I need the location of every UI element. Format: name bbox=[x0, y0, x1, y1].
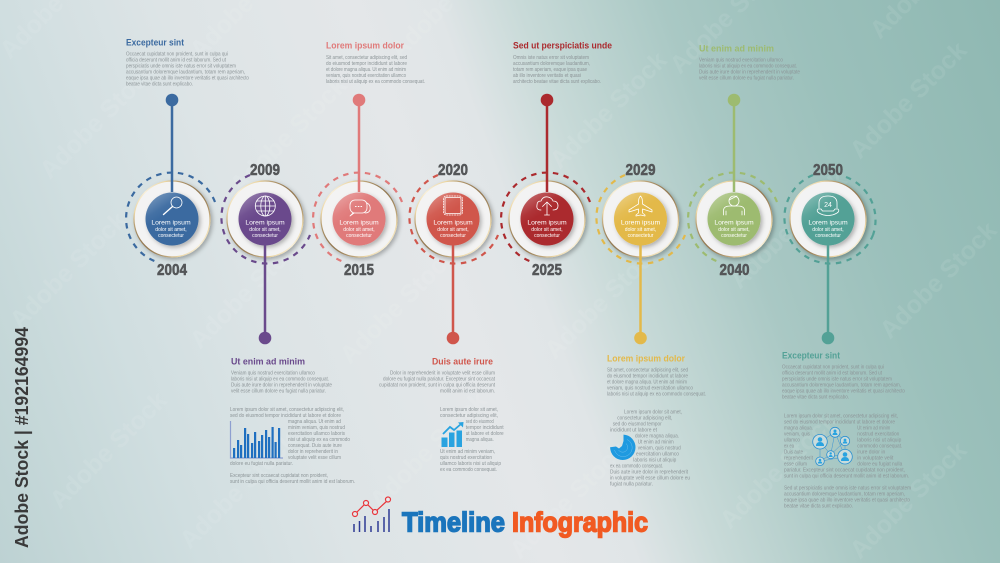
year 2050: 2050 bbox=[813, 162, 843, 179]
panel: step 8 text: esse cillum bbox=[784, 462, 807, 468]
panel: step 7 text bbox=[699, 44, 800, 82]
panel: step 6 text: Duis aute irure dolor in reprehenderit bbox=[610, 470, 689, 476]
text: Adobe Stock bbox=[334, 241, 462, 369]
panel: step 8 text: Occaecat cupidatat non proident, sunt in culpa qui bbox=[782, 364, 884, 370]
panel: step 7 text: Veniam quis nostrud exercitation ullamco bbox=[699, 58, 783, 64]
panel: step 8 text: in voluptate velit bbox=[857, 456, 894, 462]
text: Adobe Stock bbox=[364, 386, 492, 514]
panel: step 6 text: sed do eiusmod tempor bbox=[613, 422, 662, 428]
panel: step 5 text: ab illo inventore veritatis et quasi bbox=[513, 73, 581, 79]
text: Adobe Stock bbox=[224, 71, 352, 199]
step 1: 2004 milestone bbox=[126, 94, 215, 279]
panel: step 4 text: Ut enim ad minim veniam, bbox=[440, 449, 495, 455]
panel: step 4 text: dolore eu fugiat nulla pariatur. Excepteur sint occaecat bbox=[383, 377, 496, 383]
heading: step 5: Sed ut perspiciatis unde bbox=[513, 40, 612, 52]
text: Adobe Stock bbox=[504, 436, 632, 563]
pin: step 6 bbox=[634, 245, 647, 344]
pin: step 7 bbox=[728, 94, 740, 192]
text: Adobe Stock bbox=[174, 426, 302, 554]
icon: speech bubbles bbox=[350, 200, 370, 216]
step 8: 2050 milestone bbox=[784, 162, 876, 344]
panel: step 8 text: ex ea bbox=[784, 444, 794, 450]
panel: step 2 text: sunt in culpa qui officia deserunt mollit anim id est laborum. bbox=[230, 479, 355, 485]
panel: step 5 text: architecto beatae vitae dicta sunt explicabo. bbox=[513, 79, 601, 85]
step 2: 2009 milestone: consectetur bbox=[252, 233, 278, 239]
panel: step 3 text: veniam, quis nostrud exercitation ullamco bbox=[326, 73, 406, 79]
panel: step 2 text bbox=[230, 356, 355, 485]
step 7: 2040 milestone bbox=[688, 94, 777, 279]
year 2015: 2015 bbox=[344, 262, 374, 279]
pin: step 2 bbox=[259, 245, 271, 344]
icon: growth chart bbox=[442, 422, 464, 447]
panel: step 6 text: Ut enim ad minim bbox=[638, 440, 674, 446]
step 5: 2025 milestone: consectetur bbox=[534, 233, 560, 239]
step 2: 2009 milestone: Lorem ipsum bbox=[245, 220, 285, 226]
panel: step 8 text: magna aliqua. bbox=[784, 426, 813, 432]
pin: step 1 bbox=[166, 94, 178, 192]
panel: step 3 text bbox=[326, 40, 425, 85]
panel: step 8 text: Sed ut perspiciatis unde omnis iste natus error sit voluptatem bbox=[784, 486, 911, 492]
icon: support agent bbox=[724, 196, 744, 215]
panel: step 6 text: et dolore magna aliqua. Ut enim ad minim bbox=[607, 379, 687, 385]
heading: Timeline: Timeline bbox=[402, 506, 505, 538]
bar chart bbox=[230, 421, 283, 458]
panel: step 6 text: Sit amet, consectetur adipiscing elit, sed bbox=[607, 367, 688, 373]
icon: microchip bbox=[444, 196, 462, 215]
panel: step 3 text: Sit amet, consectetur adipiscing elit, sed bbox=[326, 55, 407, 61]
panel: step 3 text: do eiusmod tempor incididunt ut labore bbox=[326, 61, 407, 67]
icon: radial pie chart bbox=[610, 435, 635, 460]
heading: Infographic: Infographic bbox=[512, 506, 648, 538]
step 4: 2020 milestone bbox=[409, 162, 498, 344]
panel: step 6 text: veniam, quis nostrud bbox=[638, 446, 681, 452]
icon: magnifier bbox=[164, 197, 182, 214]
panel: step 8 text: accusantium doloremque laudantium, totam rem aperiam, bbox=[782, 382, 901, 388]
step 1: 2004 milestone: dolor sit amet, bbox=[155, 227, 187, 233]
step 1: 2004 milestone: consectetur bbox=[158, 233, 184, 239]
panel: step 4 text bbox=[379, 356, 504, 473]
heading: step 6: Lorem ipsum dolor bbox=[607, 354, 685, 364]
panel: step 5 text: totam rem aperiam, eaque ipsa quae bbox=[513, 67, 587, 73]
panel: step 2 text: consequat. Duis aute irure bbox=[288, 443, 342, 449]
panel: step 1 text: Occaecat cupidatat non proident, sunt in culpa qui bbox=[126, 52, 228, 58]
text: Adobe Stock bbox=[539, 236, 667, 364]
step 7: 2040 milestone: consectetur bbox=[721, 233, 747, 239]
panel: step 4 text: Lorem ipsum dolor sit amet, bbox=[440, 407, 498, 413]
step 5: 2025 milestone: Lorem ipsum bbox=[527, 220, 567, 226]
panel: step 6 text: Lorem ipsum dolor sit amet, bbox=[624, 410, 682, 416]
panel: step 2 text: Lorem ipsum dolor sit amet, consectetur adipiscing elit, bbox=[230, 407, 344, 413]
panel: step 2 text: velit esse cillum dolore eu fugiat nulla pariatur. bbox=[231, 389, 326, 395]
panel: step 2 text: voluptate velit esse cillum bbox=[288, 455, 341, 461]
panel: step 8 text: commodo consequat. bbox=[857, 444, 902, 450]
panel: step 4 text: consectetur adipiscing elit, bbox=[440, 413, 498, 419]
step 4: 2020 milestone: dolor sit amet, bbox=[437, 227, 469, 233]
year 2040: 2040 bbox=[720, 262, 750, 279]
panel: step 8 text: beatae vitae dicta sunt explicabo. bbox=[784, 504, 853, 510]
panel: step 2 text: magna aliqua. Ut enim ad bbox=[288, 419, 341, 425]
pin: step 4 bbox=[447, 245, 459, 344]
panel: step 5 text bbox=[513, 40, 612, 85]
panel: step 8 text: ullamco bbox=[784, 438, 800, 444]
panel: step 8 text: irure dolor in bbox=[857, 450, 886, 456]
panel: step 8 text: dolore eu fugiat nulla bbox=[857, 462, 902, 468]
panel: step 2 text: laboris nisi ut aliquip ex ea commodo consequat. bbox=[231, 377, 329, 383]
panel: step 8 text: accusantium doloremque laudantium, totam rem aperiam, bbox=[784, 492, 905, 498]
step 1: 2004 milestone: Lorem ipsum bbox=[151, 220, 191, 226]
icon: line and bar chart bbox=[352, 497, 390, 532]
panel: step 2 text: Veniam quis nostrud exercitation ullamco bbox=[231, 371, 315, 377]
panel: step 7 text: velit esse cillum dolore eu fugiat nulla pariatur. bbox=[699, 76, 794, 82]
panel: step 2 text: Excepteur sint occaecat cupidatat non proident, bbox=[230, 473, 328, 479]
step 3: 2015 milestone: consectetur bbox=[346, 233, 372, 239]
heading: step 1: Excepteur sint bbox=[126, 38, 185, 48]
step 4: 2020 milestone: consectetur bbox=[440, 233, 466, 239]
panel: step 1 text: beatae vitae dicta sunt explicabo. bbox=[126, 82, 193, 88]
panel: step 8 text: Duis aute bbox=[784, 450, 803, 456]
panel: step 6 text: incididunt ut labore et bbox=[610, 428, 658, 434]
panel: step 4 text: magna aliqua. bbox=[466, 437, 494, 443]
panel: step 6 text: fugiat nulla pariatur. bbox=[610, 482, 653, 488]
text: Adobe Stock bbox=[44, 386, 172, 514]
panel: step 7 text: laboris nisi ut aliquip ex ea commodo consequat. bbox=[699, 64, 797, 70]
panel: step 8 text: Ut enim ad minim bbox=[857, 426, 890, 432]
step 4: 2020 milestone: Lorem ipsum bbox=[433, 220, 473, 226]
panel: step 4 text: ex ea commodo consequat. bbox=[440, 467, 497, 473]
panel: step 8 text: eaque ipsa quae ab illo inventore veritatis et quasi architecto bbox=[784, 498, 910, 504]
panel: step 4 text: tempor incididunt bbox=[466, 425, 504, 431]
panel: step 4 text: quis nostrud exercitation bbox=[440, 455, 492, 461]
step 3: 2015 milestone: Lorem ipsum bbox=[339, 220, 379, 226]
panel: step 8 text: perspiciatis unde omnis iste natus error sit voluptatem bbox=[782, 376, 892, 382]
panel: step 3 text: et dolore magna aliqua. Ut enim ad minim bbox=[326, 67, 406, 73]
step 5: 2025 milestone bbox=[501, 94, 590, 279]
heading: step 4: Duis aute irure bbox=[432, 356, 493, 368]
step 8: 2050 milestone: 24 bbox=[824, 202, 832, 209]
panel: step 6 text: veniam, quis nostrud exercitation ullamco bbox=[607, 385, 693, 391]
year 2025: 2025 bbox=[532, 262, 562, 279]
panel: step 2 text: Duis aute irure dolor in reprehenderit in voluptate bbox=[231, 383, 332, 389]
text: Adobe Stock bbox=[34, 56, 162, 184]
panel: step 8 text: Lorem ipsum dolor sit amet, consectetur adipiscing elit, bbox=[784, 414, 898, 420]
step 8: 2050 milestone: Lorem ipsum bbox=[808, 220, 848, 226]
text: Adobe Stock bbox=[4, 206, 132, 334]
pin: step 8 bbox=[822, 245, 834, 344]
year 2009: 2009 bbox=[250, 162, 280, 179]
text: Adobe Stock bbox=[844, 436, 972, 563]
pin: step 3 bbox=[353, 94, 365, 192]
panel: step 5 text: Omnis iste natus error sit voluptatem bbox=[513, 55, 589, 61]
panel: step 6 text: exercitation ullamco bbox=[636, 452, 679, 458]
step 8: 2050 milestone: consectetur bbox=[815, 233, 841, 239]
panel: step 4 text: ut labore et dolore bbox=[466, 431, 504, 437]
year 2029: 2029 bbox=[626, 162, 656, 179]
text: Adobe Stock bbox=[724, 166, 852, 294]
step 6: 2029 milestone: consectetur bbox=[628, 233, 654, 239]
step 8: 2050 milestone: dolor sit amet, bbox=[812, 227, 844, 233]
step 6: 2029 milestone: Lorem ipsum bbox=[621, 220, 660, 226]
text: Adobe Stock bbox=[544, 46, 672, 174]
panel: step 8 text: nostrud exercitation bbox=[857, 432, 900, 438]
panel: step 4 text: ullamco laboris nisi ut aliquip bbox=[440, 461, 501, 467]
heading: step 2: Ut enim ad minim bbox=[231, 356, 305, 368]
panel: step 1 text bbox=[126, 38, 249, 88]
panel: step 8 text: veniam, quis bbox=[784, 432, 810, 438]
step 6: 2029 milestone: dolor sit amet, bbox=[625, 227, 656, 233]
panel: step 2 text: dolor in reprehenderit in bbox=[288, 449, 338, 455]
panel: step 6 text: dolore magna aliqua. bbox=[635, 434, 679, 440]
step 3: 2015 milestone bbox=[313, 94, 402, 279]
text: Adobe Stock bbox=[714, 406, 842, 534]
panel: step 6 text: laboris nisi ut aliquip ex ea commodo consequat. bbox=[607, 391, 706, 397]
panel: step 6 text: laboris nisi ut aliquip bbox=[633, 458, 677, 464]
step 7: 2040 milestone: Lorem ipsum bbox=[714, 220, 754, 226]
icon: 24h phone bbox=[817, 196, 839, 216]
panel: step 4 text: Dolor in reprehenderit in voluptate velit esse cillum bbox=[390, 371, 495, 377]
step 5: 2025 milestone: dolor sit amet, bbox=[531, 227, 563, 233]
panel: step 1 text: accusantium doloremque laudantium, totam rem aperiam, bbox=[126, 70, 245, 76]
panel: step 6 text: ex ea commodo consequat. bbox=[610, 464, 663, 470]
title block bbox=[352, 497, 648, 538]
step 6: 2029 milestone bbox=[596, 162, 685, 344]
step 7: 2040 milestone: dolor sit amet, bbox=[718, 227, 750, 233]
panel: step 1 text: eaque ipsa quae ab illo inventore veritatis et quasi architecto bbox=[126, 76, 249, 82]
heading: step 8: Excepteur sint bbox=[782, 350, 841, 362]
panel: step 1 text: perspiciatis unde omnis iste natus error sit voluptatem bbox=[126, 64, 236, 70]
text: Adobe Stock bbox=[184, 226, 312, 354]
year 2020: 2020 bbox=[438, 162, 468, 179]
year 2004: 2004 bbox=[157, 262, 187, 279]
panel: step 8 text: reprehenderit bbox=[784, 456, 814, 462]
panel: step 7 text: Duis aute irure dolor in reprehenderit in voluptate bbox=[699, 70, 800, 76]
icon: airplane bbox=[629, 196, 652, 216]
panel: step 2 text: sed do eiusmod tempor incididunt ut labore et dolore bbox=[230, 413, 341, 419]
text: Adobe Stock bbox=[874, 216, 1000, 344]
text: Adobe Stock bbox=[844, 36, 972, 164]
panel: step 5 text: accusantium doloremque laudantium, bbox=[513, 61, 590, 67]
stock id side label: Adobe Stock | #192164994 bbox=[12, 327, 32, 548]
panel: step 3 text: laboris nisi ut aliquip ex ea commodo consequat. bbox=[326, 79, 425, 85]
icon: globe bbox=[255, 196, 275, 216]
panel: step 1 text: officia deserunt mollit anim id est laborum. Sed ut bbox=[126, 58, 227, 64]
panel: step 4 text: sed do eiusmod bbox=[466, 419, 494, 425]
panel: step 8 text: sed do eiusmod tempor incididunt ut labore et dolore bbox=[784, 420, 895, 426]
panel: step 8 text: officia deserunt mollit anim id est laborum. Sed ut bbox=[782, 370, 883, 376]
icon: cloud upload bbox=[537, 197, 558, 215]
panel: step 8 text: beatae vitae dicta sunt explicabo. bbox=[782, 394, 849, 400]
panel: step 2 text: nisi ut aliquip ex ea commodo bbox=[288, 437, 350, 443]
panel: step 8 text bbox=[782, 350, 911, 510]
step 2: 2009 milestone bbox=[221, 162, 310, 344]
panel: step 6 text: in voluptate velit esse cillum dolore eu bbox=[610, 476, 690, 482]
heading: step 7: Ut enim ad minim bbox=[699, 44, 774, 54]
panel: step 4 text: cupidatat non proident, sunt in culpa qui officia deserunt bbox=[379, 383, 496, 389]
heading: step 3: Lorem ipsum dolor bbox=[326, 40, 404, 52]
pin: step 5 bbox=[541, 94, 553, 192]
panel: step 6 text: consectetur adipiscing elit, bbox=[617, 416, 672, 422]
step 2: 2009 milestone: dolor sit amet, bbox=[249, 227, 281, 233]
step 3: 2015 milestone: dolor sit amet, bbox=[343, 227, 375, 233]
icon: people network bbox=[813, 427, 852, 466]
panel: step 8 text: laboris nisi ut aliquip bbox=[857, 438, 902, 444]
panel: step 2 text: exercitation ullamco laboris bbox=[288, 431, 345, 437]
panel: step 6 text bbox=[607, 354, 706, 488]
panel: step 4 text: mollit anim id est laborum. bbox=[440, 389, 495, 395]
panel: step 8 text: pariatur. Excepteur sint occaecat cupidatat non proident, bbox=[784, 468, 905, 474]
panel: step 8 text: eaque ipsa quae ab illo inventore veritatis et quasi architecto bbox=[782, 388, 905, 394]
panel: step 6 text: do eiusmod tempor incididunt ut labore bbox=[607, 373, 688, 379]
panel: step 2 text: minim veniam, quis nostrud bbox=[288, 425, 345, 431]
panel: step 8 text: sunt in culpa qui officia deserunt mollit anim id est laborum. bbox=[784, 474, 909, 480]
panel: step 2 text: dolore eu fugiat nulla pariatur. bbox=[230, 461, 293, 467]
